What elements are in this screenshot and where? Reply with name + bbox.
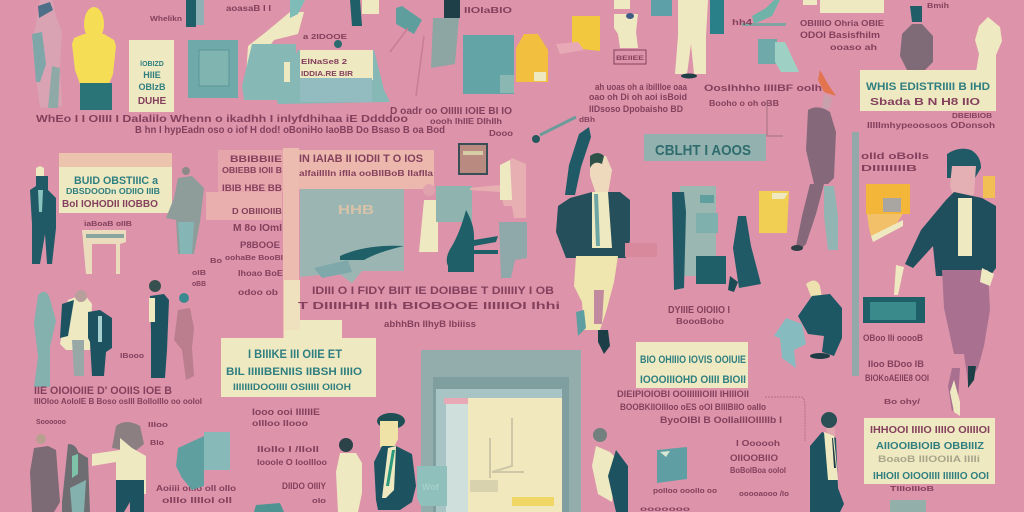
text: small label: Whelikn (150, 16, 182, 23)
figure: yellow bust (72, 7, 116, 110)
banner: left: DBSDOODn ODIIO IIIB (66, 187, 160, 196)
text: below cream note: oIIIoo IIooo (252, 419, 308, 428)
icon: teal note (417, 466, 447, 506)
text: central upper right lines: OosIhhho IIIIBF ooIh (704, 83, 822, 93)
text: below cream note: DIIDO OIIIY (282, 481, 326, 491)
banner: center right cream (636, 342, 748, 388)
text: stacked left column: oBB (192, 281, 206, 288)
figure group: four people left: IBooo (120, 353, 144, 360)
text: long mid lines: WhEo I I OIIII I Dalalilo Whenn o ikadhh I inlyfdhihaa iE Ddddoo (36, 114, 408, 125)
banner: bottom right cream: IHIOII OIOOIIII IIIIIIO OOI (873, 471, 989, 482)
text: stacked left column: IBIB HBE BB (222, 183, 283, 193)
text: below barrel area: BIOKoAEIIE8 OOI (865, 373, 929, 383)
icon: teal cylinder with paper (758, 39, 799, 72)
illustration: machine with cream roof (242, 0, 390, 104)
text: below cream note: IIoIIo I /IIoIl (257, 445, 319, 454)
banner: upper right (860, 70, 996, 111)
text: right small labels (861, 151, 929, 173)
card: cream note (129, 40, 174, 112)
arrow: grey hook (532, 117, 576, 143)
banner: center right cream: IOOOIIIOHD OIIII BIOII (640, 374, 746, 386)
text: lower centre-right labels: OIIOOBIIO (730, 453, 778, 463)
text: central upper right lines (589, 82, 822, 114)
text: under four people: IIIoo (148, 422, 168, 429)
icon: teal crate (657, 447, 687, 483)
figure: cream standing person (651, 0, 724, 78)
text: below cream note: IoooIe O IooIIIoo (257, 458, 327, 467)
icon: dark teal briefcase (863, 297, 925, 323)
figure group: bottom left people (30, 422, 146, 512)
text: block upper right centre (732, 18, 885, 52)
banner: bottom right cream: BoaoB IIIOOIIA IIIIi (878, 454, 980, 464)
text: left of main man: IDIII O I FIDY BIIT IE DOIBBE T DIIIIIY I OB (312, 285, 554, 297)
text: bust label: Bmih (927, 3, 949, 10)
heading: pink panel: IN IAIAB II IODII T O IOS (299, 153, 423, 165)
icon: cream bust on plinth (614, 0, 646, 64)
card: cream note: HIIE (143, 70, 161, 80)
icon: teal hat bottom (254, 503, 284, 512)
text: stacked left column: BBIBBIIE (230, 154, 282, 164)
figure: salesman left (30, 166, 56, 264)
text: block upper right centre: hh4 (732, 18, 753, 27)
banner: left (59, 153, 172, 213)
line: bracket (767, 100, 783, 136)
figure: legs with note (350, 0, 379, 26)
text: lower centre-right labels: BoBoIBoa ooIoI (730, 466, 786, 475)
text: stacked left column: Ihoao BoE (238, 269, 284, 278)
heading: pink panel: alfaiIIlIn ifIIa ooBIIBoB IIafIIa (299, 169, 434, 178)
figure: bowing person (592, 428, 628, 512)
text: left of main man: T DIIIIHIH IIIh BIOBOOE IIIIIIOI Ihhi (298, 301, 560, 312)
figure: legs top (186, 0, 204, 27)
figure: main young man (556, 127, 657, 354)
text: below barrel area (668, 305, 929, 406)
panel: blue screen with swoosh: HHB (338, 202, 374, 217)
text: top right of center label: IIOIaBIO (464, 6, 512, 15)
text: long mid lines (36, 106, 513, 138)
icon: yellow tag (556, 16, 600, 54)
figure: cream coat (419, 184, 438, 252)
icon: cream vase (975, 17, 1002, 72)
figure: striped person top left (32, 0, 62, 108)
text: block upper right centre: OBIIIIO Ohria OBIE (800, 19, 885, 28)
figure: man bottom right centre (810, 412, 844, 512)
text: right small labels: olld oBoIIs (861, 151, 929, 161)
banner: centre cream note: I BIIIKE III OIIE ET (248, 347, 343, 361)
banner: centre cream note: IIIIIIIDOOIIII OSIIIII OIIOH (233, 382, 351, 392)
icon: cream banner top (803, 0, 884, 13)
line: dotted leader (765, 397, 805, 441)
figure: large man right (894, 149, 996, 416)
text: below barrel area: OBoo IIi ooooB (863, 333, 923, 343)
text: lower centre-right labels: poIIoo oooIIo oo (653, 488, 717, 495)
text: lower centre-right labels: I Oooooh (736, 439, 780, 448)
text: machine label: a 2IDOOE (303, 34, 347, 41)
text: stacked left column: Bo (210, 258, 222, 265)
figure: couple bottom centre (336, 413, 416, 512)
text: below cream note (156, 407, 327, 505)
banner: grey label: CBLHT I AOOS (655, 142, 751, 159)
text: stacked left column: M 8o IOmI (233, 223, 282, 234)
figure: mauve man walking (791, 70, 838, 251)
text: below cream note: oIo (312, 498, 326, 505)
icon: teal box (463, 35, 514, 94)
figure: seated person (774, 280, 842, 368)
figure: grey person (166, 167, 204, 254)
icon: yellow package (516, 34, 548, 82)
banner: left: BUID OBSTIIIC a (74, 175, 159, 187)
text: below barrel area: DYIIIE OIOIIO I (668, 305, 730, 316)
illustration: machine with cream roof: IDDIA.RE BIR (301, 71, 353, 78)
text: block upper right centre: ODOI Basisfhilm (800, 30, 880, 40)
text: central upper right lines: ah uoas oh a ibiIlIoe oaa (595, 82, 688, 92)
icon: cream bust on plinth: BEIIEE (616, 56, 644, 62)
banner: bottom right cream: IHHOOI IIIIO IIIIO OIIIIOI (870, 425, 990, 436)
text: under cream banner: ByoOIBI B OoIIaIIIOIIIIIb I (660, 415, 782, 425)
figure: mauve bust (900, 6, 933, 70)
banner: bottom right cream: TIIIoIIIoB (890, 486, 934, 493)
text: hook label: dBh (579, 117, 595, 124)
panel: doorway with cream poster (421, 350, 581, 512)
text: under four people: IIE OIOIOIIE D' OOIIS IOE B (34, 385, 172, 397)
text: stacked left column (192, 154, 284, 297)
banner: left: BoI IOHODII IIOBBO (62, 199, 158, 210)
text: under cream banner: BOOBKIIOIIIoo oES oOI BIIIBIIO oaIIo (620, 402, 766, 412)
illustration: green bird stand (742, 0, 786, 26)
icon: grey pole (852, 132, 859, 376)
text: below cream note: Aoiiii oiiio oII oIIo (156, 484, 236, 493)
icon: teal folder (176, 432, 230, 490)
text: under banner: IIIIImhypeoosoos ODonsoh (867, 121, 995, 130)
text: stacked left column: oIB (192, 270, 206, 277)
text: lower centre-right labels: ooooaooo /Io (739, 491, 789, 498)
text: under four people: IIIOIoo AoIoIE B Boso osIII BoIIoIIIo oo ooIoI (34, 397, 202, 406)
illustration: small machine: iaBoaB oIIB (84, 221, 132, 228)
banner: center right cream: BIO OHIIIO IOVIS OOIUIE (640, 354, 746, 366)
text: below barrel area: Bo ohy/ (884, 399, 920, 406)
text: stacked left column: P8BOOE (240, 240, 280, 250)
text: central upper right lines: oao oh Di oh aoi isBoid (589, 92, 687, 102)
icon: framed picture (459, 144, 487, 174)
text: long mid lines: B hn I hypEadn oso o iof H dod! oBoniHo IaoBB Do Bsaso B oa Bod (135, 125, 445, 136)
text: central upper right lines: IIDsoso Dpobaisho BD (589, 104, 683, 114)
card: cream note: DUHE (138, 96, 166, 107)
panel: pink overlap blocks (206, 148, 434, 344)
banner: centre cream note: BIL IIIIIBENIIS IIBSH IIIIO (226, 366, 362, 378)
illustration: machine with cream roof: ElNaSe8 2 (301, 59, 347, 66)
banner: bottom right cream: AIIOOIBIOIB OBBIIIZ (876, 441, 984, 452)
text: left of main man: abhhBn IIhyB Ibiiiss (384, 319, 476, 329)
text: central upper right lines: Booho o oh oBB (709, 99, 779, 108)
panel: blue screen with swoosh (300, 189, 404, 283)
text: under banner (867, 113, 995, 130)
text: under banner: DBEIBIOB (952, 113, 992, 120)
icon: orange box (866, 184, 910, 242)
banner: upper right: WHIS EDISTRIIII B IHD (866, 81, 990, 93)
figure: teal chair (436, 186, 498, 272)
illustration: teal machine with coats (672, 186, 761, 292)
text: stacked left column: D OBIIIOIIB (232, 207, 282, 216)
text: below cream note: Iooo ooi IIIIIIE (252, 407, 320, 417)
icon: teal note: Wof (422, 482, 440, 492)
text: stacked left column: OBIEBB IOII B (222, 166, 282, 175)
text: under four people: Soooooo (36, 419, 66, 426)
card: cream note: lOBIZD (140, 61, 164, 68)
text: block upper right centre: ooaso ah (830, 43, 877, 52)
text: under four people (34, 385, 202, 447)
text: left of main man (298, 285, 560, 329)
icon: yellow barrel (759, 191, 789, 233)
icon: teal lamp and stand (390, 6, 424, 96)
text: long mid lines: D oadr oo OIIIII IOIE BI IO (390, 106, 512, 117)
figure group: four people left (34, 280, 194, 387)
icon: grey bottom shape (890, 500, 926, 512)
icon: teal frame (188, 40, 238, 98)
text: below barrel area: BoooBobo (676, 317, 724, 326)
figure: person pointing (470, 158, 527, 278)
banner: centre cream note (221, 338, 376, 397)
figure: person with black top (431, 0, 460, 68)
text: stacked left column: oohaBe BooBI (225, 255, 283, 262)
text: under four people: BIo (150, 440, 164, 447)
text: stacked left column: odoo ob (238, 288, 278, 297)
card: cream note: OBIzB (138, 82, 166, 92)
text: right small labels: DIIIIIIIIB (861, 164, 917, 173)
banner: bottom right cream (864, 418, 995, 493)
text: under cream banner: DIEIPIOIOBI OOIIIIIIOIII IHIIIOII (617, 389, 749, 399)
banner: grey label (644, 134, 766, 161)
banner: upper right: Sbada B N H8 IIO (870, 97, 980, 108)
text: lower centre-right labels (640, 439, 789, 512)
text: long mid lines: oooh IhIIE DIhIIh (430, 117, 502, 126)
heading: pink panel (299, 153, 434, 178)
illustration: small machine (82, 221, 132, 274)
text: long mid lines: Dooo (489, 129, 513, 138)
text: top label: aoasaB I I (226, 4, 271, 13)
text: under cream banner (617, 389, 782, 425)
text: below barrel area: IIoo BDoo IB (868, 359, 925, 369)
text: below cream note: oIIIo IIIIoI oII (162, 496, 232, 505)
